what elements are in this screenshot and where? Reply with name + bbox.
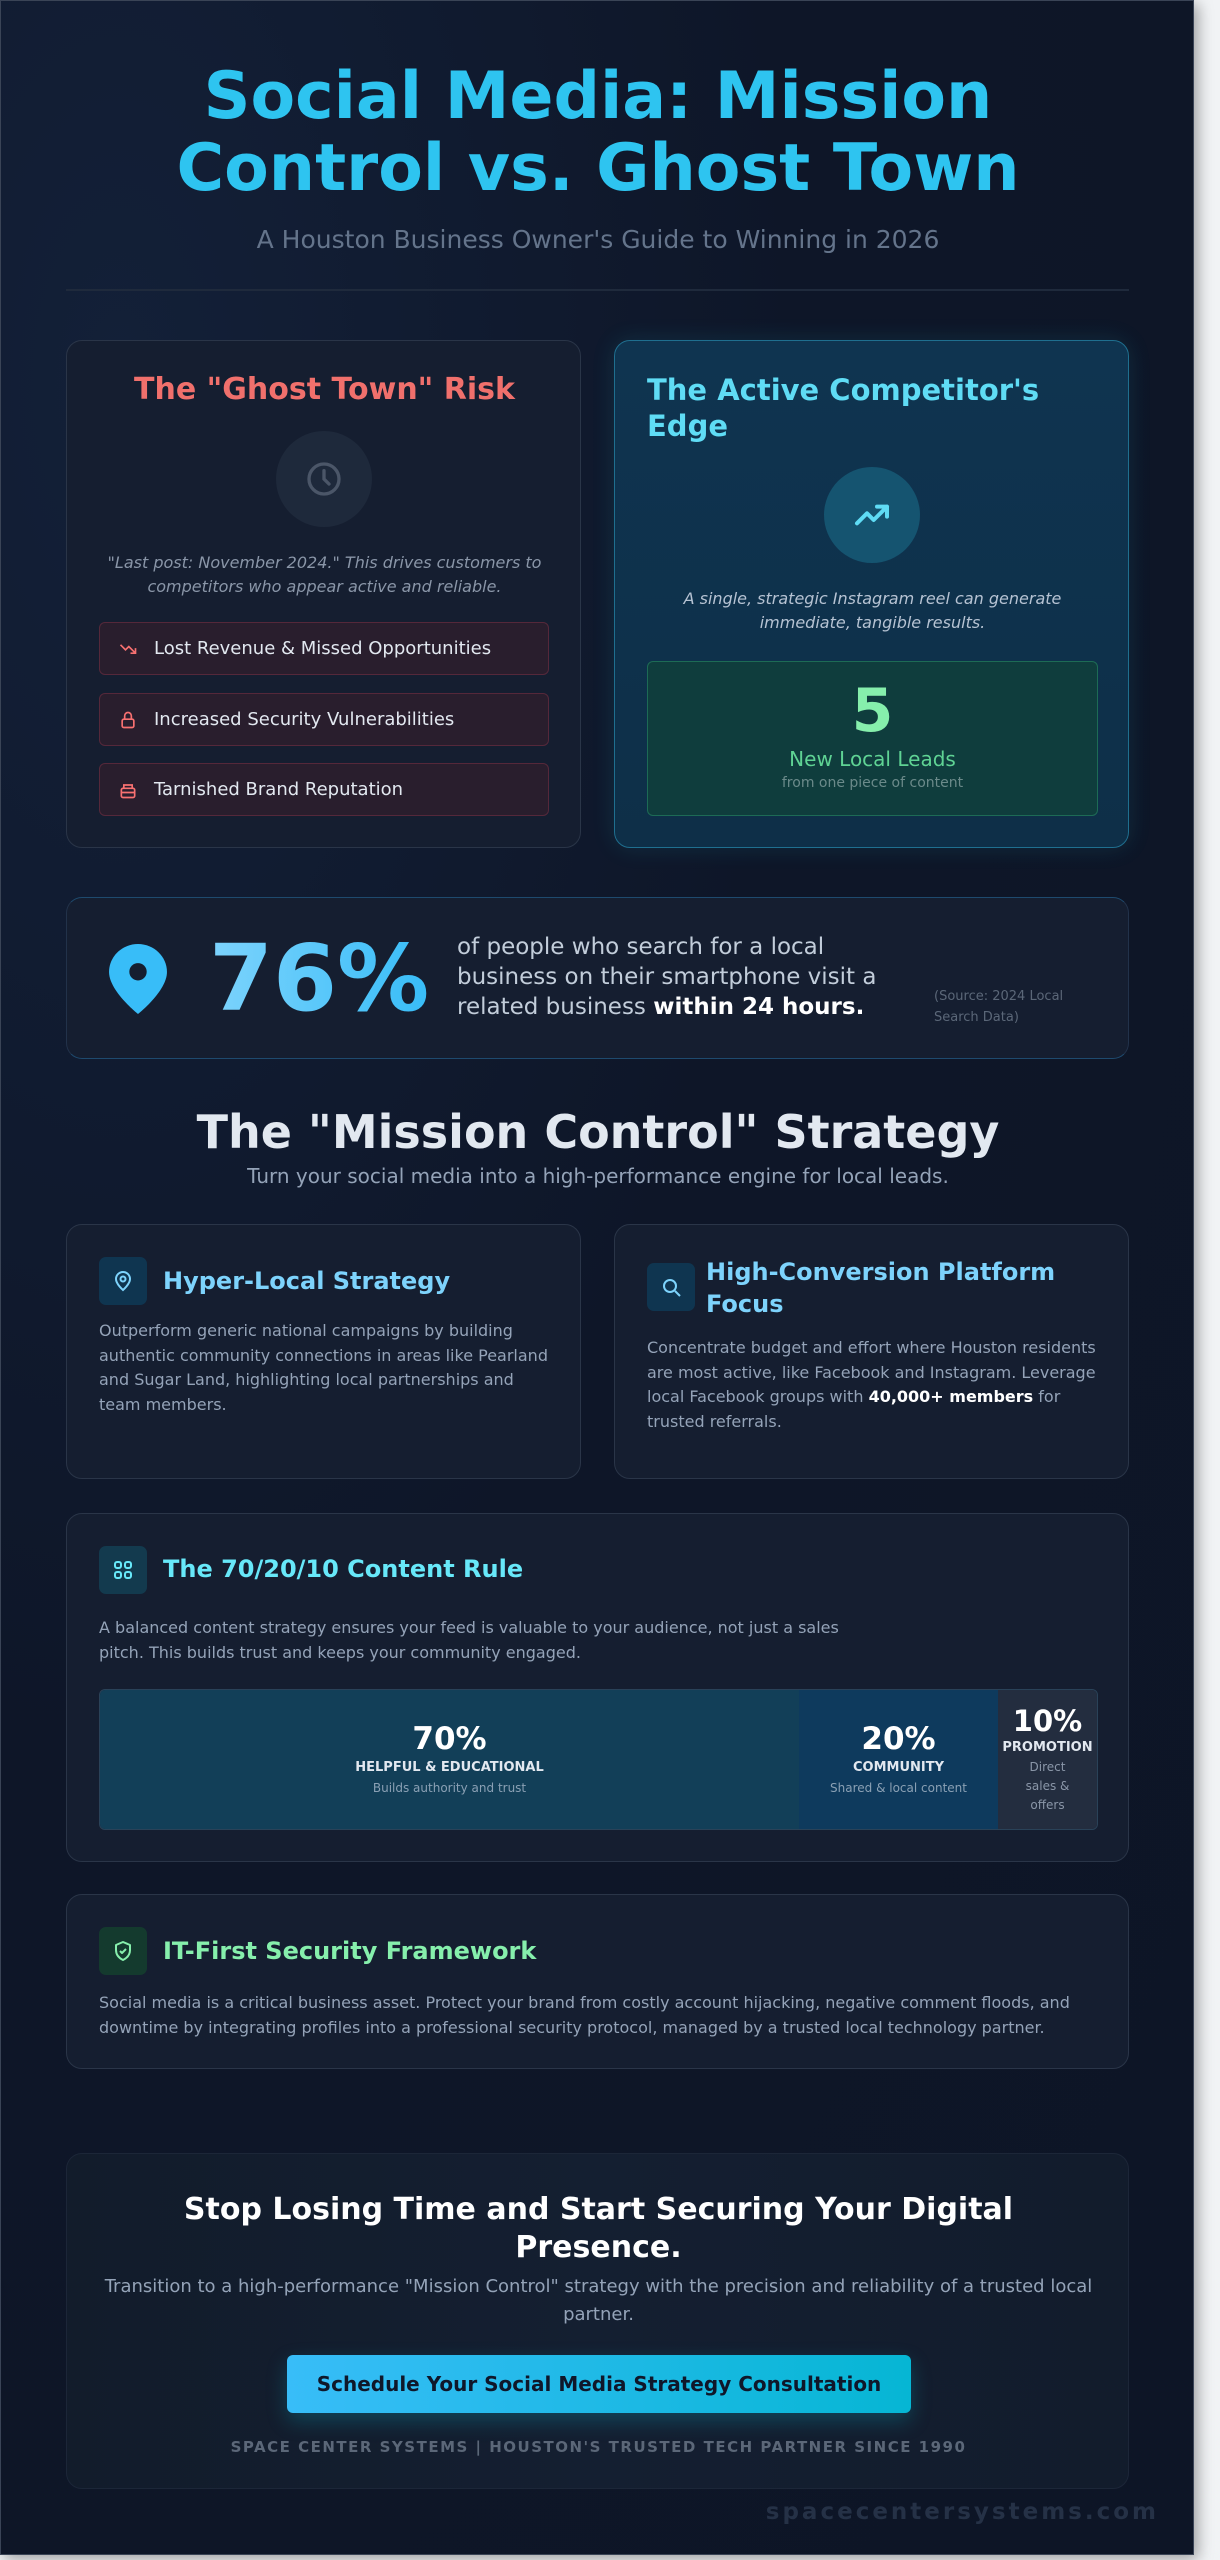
panel: high-conversion bbox=[614, 1224, 1129, 1479]
segment: 20% bbox=[799, 1690, 998, 1829]
stat box: 5 leads: 5 bbox=[852, 676, 893, 746]
segment: 70% bbox=[100, 1690, 799, 1829]
text: hyper-local: Outperform generic national campaigns by building authentic community connections in areas like Pearland and Sugar Land, highlighting local partnerships and team members. bbox=[99, 1321, 548, 1414]
panel: 70/20/10 rule bbox=[66, 1513, 1129, 1862]
icon: map pin bbox=[109, 944, 167, 1014]
item: security: Increased Security Vulnerabilities bbox=[154, 709, 454, 730]
text: stat description: of people who search for a local business on their smartphone visit a related business within 24 hours. bbox=[457, 934, 876, 1020]
subtitle: A Houston Business Owner's Guide to Winning in 2026 bbox=[257, 225, 939, 254]
item: reputation: Tarnished Brand Reputation bbox=[154, 779, 403, 800]
big number: 76% bbox=[209, 925, 429, 1032]
heading: hyper-local: Hyper-Local Strategy bbox=[163, 1267, 450, 1295]
text: security: Social media is a critical business asset. Protect your brand from costly account hijacking, negative comment floods, and downtime by integrating profiles into a professional security protocol, managed by a trusted local technology partner. bbox=[99, 1993, 1070, 2036]
button: schedule consultation bbox=[287, 2355, 911, 2413]
segment: 20%: COMMUNITY bbox=[853, 1760, 944, 1775]
text: content rule: A balanced content strategy ensures your feed is valuable to your audience, not just a sales pitch. This builds trust and keeps your community engaged. bbox=[99, 1618, 839, 1662]
segment: 10%: Direct sales & offers bbox=[1026, 1760, 1069, 1812]
title: Social Media: Mission bbox=[204, 59, 992, 134]
item: reputation bbox=[99, 763, 549, 816]
item: lost revenue: Lost Revenue & Missed Opportunities bbox=[154, 638, 491, 659]
panel: call to action bbox=[66, 2153, 1129, 2489]
icon: trend up bbox=[824, 467, 920, 563]
icon: grid bbox=[99, 1546, 147, 1594]
button: schedule consultation: Schedule Your Social Media Strategy Consultation bbox=[317, 2372, 881, 2396]
icon: location bbox=[99, 1257, 147, 1305]
title: Control vs. Ghost Town bbox=[176, 131, 1020, 206]
icon: clock bbox=[276, 431, 372, 527]
item: lost revenue bbox=[99, 622, 549, 675]
text: instagram reel: A single, strategic Instagram reel can generate immediate, tangible results. bbox=[684, 589, 1061, 632]
subheading: Turn your social media into a high-performance engine for local leads. bbox=[247, 1164, 949, 1188]
heading: competitor edge: The Active Competitor's Edge bbox=[647, 373, 1039, 443]
panel: hyper-local bbox=[66, 1224, 581, 1479]
panel: active competitor bbox=[614, 340, 1129, 848]
panel: 76% stat bbox=[66, 897, 1129, 1059]
segment: 10%: PROMOTION bbox=[1002, 1740, 1093, 1755]
segment: 20%: 20% bbox=[861, 1721, 936, 1757]
heading: high-conversion: High-Conversion Platform Focus bbox=[706, 1258, 1055, 1318]
chart: content split bar bbox=[99, 1689, 1098, 1830]
segment: 70%: Builds authority and trust bbox=[373, 1781, 526, 1795]
stat box: 5 leads: New Local Leads bbox=[789, 747, 956, 771]
item: security bbox=[99, 693, 549, 746]
stat box: 5 leads bbox=[647, 661, 1098, 816]
text: high-conversion: Concentrate budget and effort where Houston residents are most active, like Facebook and Instagram. Leverage local Facebook groups with 40,000+ members for trusted referrals. bbox=[647, 1338, 1096, 1430]
segment: 10%: 10% bbox=[1013, 1704, 1082, 1738]
source: (Source: 2024 Local Search Data) bbox=[934, 989, 1063, 1025]
heading: cta: Stop Losing Time and Start Securing Your Digital Presence. bbox=[184, 2192, 1013, 2265]
segment: 70%: HELPFUL & EDUCATIONAL bbox=[355, 1760, 544, 1775]
text: cta: Transition to a high-performance "Mission Control" strategy with the precision and reliability of a trusted local partner. bbox=[105, 2276, 1092, 2325]
text: last post: "Last post: November 2024." This drives customers to competitors who appear active and reliable. bbox=[108, 553, 541, 596]
heading: content rule: The 70/20/10 Content Rule bbox=[163, 1555, 523, 1583]
segment: 10% bbox=[998, 1690, 1097, 1829]
stat box: 5 leads: from one piece of content bbox=[782, 775, 963, 791]
watermark: website: spacecentersystems.com bbox=[766, 2499, 1159, 2525]
title bbox=[176, 59, 1020, 206]
segment: 70%: 70% bbox=[412, 1721, 487, 1757]
segment: 20%: Shared & local content bbox=[830, 1781, 967, 1795]
icon: search bbox=[647, 1263, 695, 1311]
footer text: SPACE CENTER SYSTEMS | HOUSTON'S TRUSTED TECH PARTNER SINCE 1990 bbox=[231, 2438, 966, 2456]
panel: ghost town risk bbox=[66, 340, 581, 848]
heading: ghost town: The "Ghost Town" Risk bbox=[134, 372, 515, 407]
panel: security framework bbox=[66, 1894, 1129, 2069]
heading: mission control strategy: The "Mission Control" Strategy bbox=[197, 1105, 999, 1159]
heading: security: IT-First Security Framework bbox=[163, 1937, 536, 1965]
icon: shield bbox=[99, 1927, 147, 1975]
